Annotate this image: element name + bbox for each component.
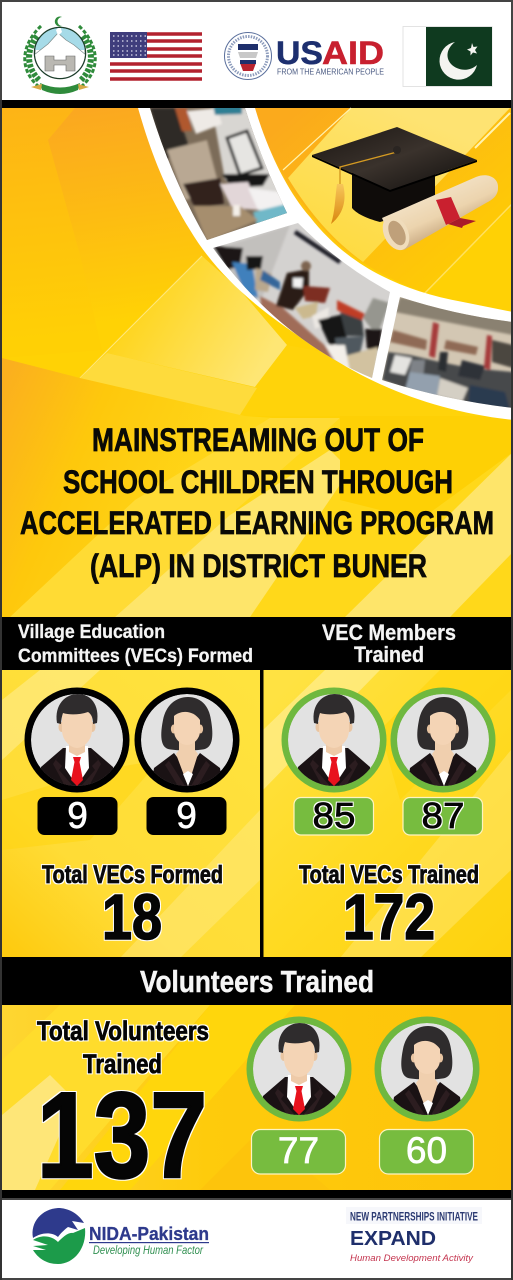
badge: female VECs 9 [146, 795, 226, 836]
heading: Village Education Committees Formed: Village Education [18, 622, 165, 643]
label: Total Volunteers Trained: Total Volunteers [37, 1016, 209, 1046]
logo: Khyber Pakhtunkhwa emblem [25, 16, 95, 94]
white photo ribbon [138, 108, 513, 420]
icon: female member black ring [134, 688, 240, 792]
logo: NIDA-Pakistan emblem [33, 1208, 85, 1264]
badge: female volunteers 60: 60 [406, 1130, 447, 1171]
logo: United States flag [110, 32, 202, 81]
number: 137: 137 [37, 1067, 207, 1203]
icon: female volunteer [374, 1016, 480, 1122]
title: MAINSTREAMING OUT OF [92, 422, 424, 458]
badge: female members 87: 87 [422, 795, 464, 836]
icon: male member green ring [282, 688, 386, 792]
header logo strip [1, 1, 512, 101]
panel background: VEC sections [2, 670, 511, 958]
logo: USAID wordmark: FROM THE AMERICAN PEOPLE [277, 66, 384, 76]
badge: male volunteers 77: 77 [278, 1130, 319, 1171]
bottom black band [0, 1190, 513, 1199]
number: 172: 172 [343, 881, 435, 953]
heading band: Volunteers Trained: Volunteers Trained [140, 964, 374, 999]
logo: Pakistan flag [403, 26, 492, 86]
heading: VEC Members Trained: Trained [354, 642, 424, 667]
panel background [2, 1005, 511, 1190]
icon: male member black ring [24, 688, 130, 792]
panel: VECs formed [24, 688, 240, 953]
tassel [331, 146, 401, 224]
badge: male VECs 9 [38, 795, 118, 836]
icon: graduation cap with diploma [312, 127, 498, 254]
label: Total Volunteers Trained [37, 1016, 209, 1079]
icon: male volunteer [246, 1016, 352, 1122]
label: Total Volunteers Trained: Trained [83, 1049, 162, 1079]
photo: standing presenter with participants [213, 223, 390, 378]
panel divider [260, 670, 264, 958]
badge: male volunteers 77 [252, 1130, 346, 1174]
logo: NIDA-Pakistan wordmark: Developing Human Factor [93, 1243, 204, 1257]
icon: female member green ring [390, 688, 496, 792]
badge: male VECs 9: 9 [67, 795, 88, 836]
photo: group meeting in courtyard [380, 295, 513, 410]
region between arc and right edge [253, 108, 513, 315]
logo: NIDA-Pakistan wordmark: NIDA-Pakistan [89, 1224, 209, 1244]
logo: USAID wordmark: AID [322, 35, 384, 71]
heading: VEC Members Trained [322, 620, 456, 667]
title [20, 422, 494, 584]
photo: classroom with seated students [150, 108, 287, 240]
cap board [312, 127, 477, 190]
cap skull [352, 172, 435, 222]
hero background [2, 108, 513, 618]
logo: New Partnerships Initiative EXPAND: Human Development Activity [350, 1253, 474, 1264]
badge: male members 85: 85 [312, 795, 356, 836]
panel header band: VEC sections [0, 617, 513, 670]
logo: NIDA-Pakistan wordmark [89, 1224, 209, 1257]
title: (ALP) IN DISTRICT BUNER [90, 548, 427, 584]
panel: VEC members trained [282, 688, 496, 953]
heading: Village Education Committees Formed: Committees (VECs) Formed [18, 646, 253, 667]
footer logo strip [1, 1199, 512, 1279]
panel: volunteers trained [2, 1005, 511, 1203]
label: Total VECs Formed: Total VECs Formed [42, 861, 223, 889]
logo: USAID seal [224, 32, 272, 80]
diploma roll [378, 175, 498, 254]
logo: USAID wordmark [276, 35, 384, 76]
heading band: Volunteers Trained [0, 957, 513, 1005]
heading: VEC Members Trained: VEC Members [322, 620, 456, 645]
top black band [0, 100, 513, 108]
heading: Village Education Committees Formed [18, 622, 253, 667]
badge: female VECs 9: 9 [176, 795, 197, 836]
badge: male members 85 [294, 795, 374, 836]
logo: New Partnerships Initiative EXPAND [346, 1207, 482, 1264]
logo: USAID wordmark: US [276, 35, 323, 71]
badge: female volunteers 60 [380, 1130, 474, 1174]
number: 18: 18 [102, 881, 162, 953]
badge: female members 87 [403, 795, 482, 836]
logo: New Partnerships Initiative EXPAND: EXPAND [350, 1228, 436, 1250]
